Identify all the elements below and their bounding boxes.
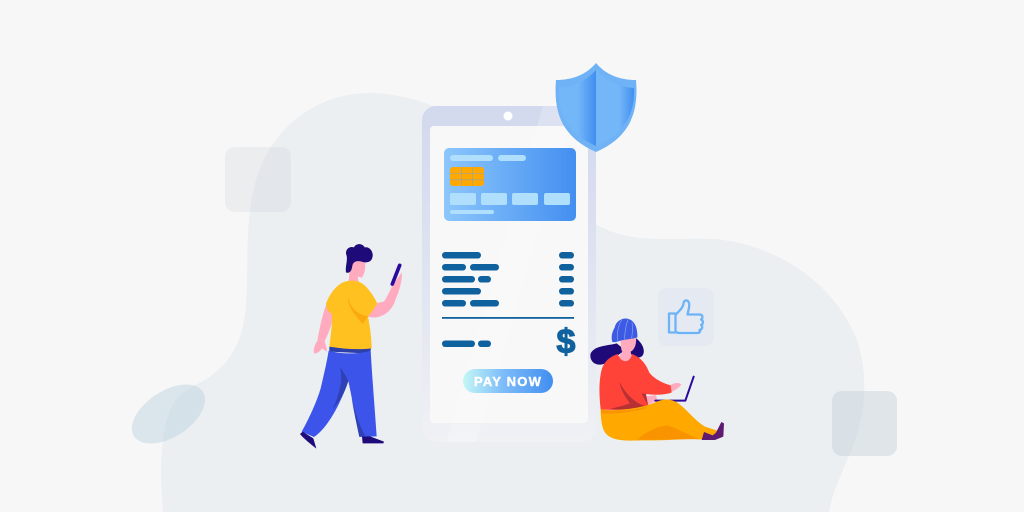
hair (346, 244, 373, 273)
background blob (161, 93, 864, 512)
trousers (601, 399, 717, 441)
pay now button: PAY NOW (474, 374, 542, 389)
trousers (302, 351, 377, 437)
pay now button (463, 369, 553, 393)
phone body (422, 106, 596, 442)
icon: thumbs up (669, 300, 703, 333)
decorative ellipse (122, 372, 215, 456)
dollar sign: $ (557, 323, 576, 361)
icon: shield (556, 63, 636, 152)
waistband (329, 347, 371, 354)
receipt lines (442, 252, 574, 347)
shoes (702, 422, 724, 440)
long hair (590, 337, 644, 365)
woman with laptop (590, 318, 724, 441)
man with phone (300, 244, 402, 449)
decorative square: upper left (225, 147, 291, 212)
shoes (300, 432, 316, 449)
thumbs up icon panel (658, 288, 714, 346)
trouser shading (601, 406, 700, 440)
trouser folds (333, 367, 365, 436)
knit hat (612, 318, 637, 342)
phone screen (430, 126, 588, 423)
card chip (450, 167, 484, 186)
phone camera (504, 112, 512, 120)
neck and face (348, 255, 365, 282)
decorative square: lower right (832, 391, 897, 456)
phone (422, 106, 596, 442)
sweater (599, 354, 672, 410)
hand on laptop (645, 383, 681, 405)
shirt (326, 281, 377, 349)
face and neck (618, 337, 636, 362)
laptop (655, 377, 694, 401)
sweater shading (610, 382, 648, 410)
credit card (444, 148, 576, 221)
left arm (314, 303, 334, 354)
phone (392, 265, 400, 284)
right arm (367, 272, 402, 318)
